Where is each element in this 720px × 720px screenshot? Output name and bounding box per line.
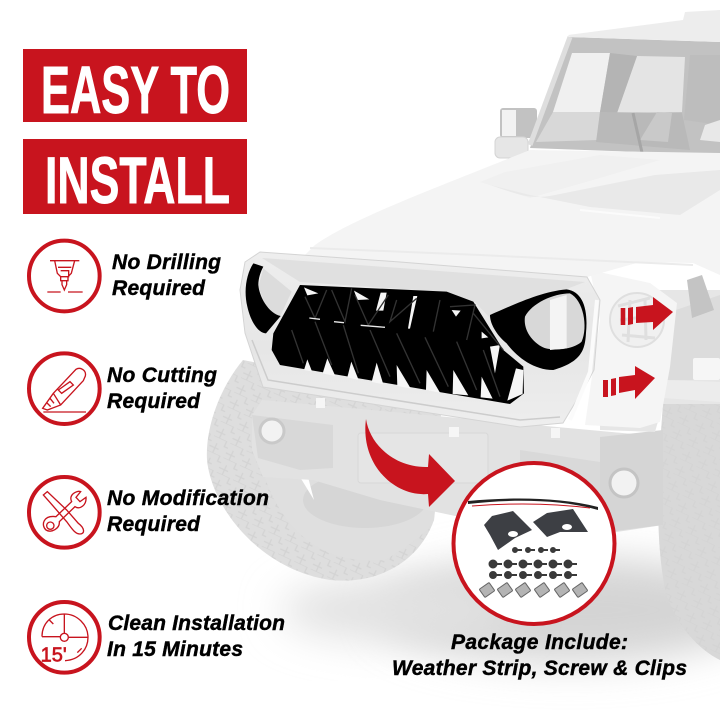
red arrow to headlight: bar 2 — [628, 307, 633, 325]
left eye black — [246, 263, 281, 333]
icon: wrench and screwdriver — [29, 477, 100, 548]
icon: drill — [29, 241, 100, 311]
right tyre — [658, 400, 720, 660]
clips — [479, 582, 588, 598]
curved red arrow — [365, 419, 455, 507]
grille right highlight — [570, 300, 597, 420]
text: Required — [107, 390, 201, 413]
title: install: INSTALL — [45, 143, 230, 217]
left tyre — [207, 360, 442, 581]
lower body right — [600, 290, 720, 432]
right eye black — [490, 289, 587, 370]
white teeth — [304, 287, 523, 401]
front fender — [585, 270, 677, 428]
feature: no cutting — [29, 353, 217, 424]
title: easy to: EASY TO — [41, 53, 230, 128]
grille lower edge — [252, 340, 560, 420]
package circle — [454, 463, 614, 624]
hood latch — [687, 275, 714, 318]
package caption: Package Include: — [451, 631, 628, 654]
red arrow lower — [603, 366, 655, 399]
red arrow to headlight: bar 1 — [621, 308, 625, 325]
feature: clean installation — [29, 602, 285, 673]
jeep vehicle (faded) — [207, 10, 720, 660]
headlight — [610, 293, 664, 347]
text: No Modification — [107, 487, 269, 510]
hood — [305, 150, 720, 277]
grille — [240, 252, 600, 427]
icon: 15 minute clock: 15' — [41, 644, 67, 666]
weather strip — [468, 499, 598, 510]
right eye mesh — [525, 293, 585, 350]
red arrow to headlight: head — [636, 297, 673, 330]
brackets — [484, 509, 588, 550]
text: In 15 Minutes — [107, 638, 243, 661]
text: Clean Installation — [108, 612, 285, 635]
feature: no drilling — [29, 241, 221, 311]
left eye light — [258, 268, 292, 317]
text: Required — [107, 513, 201, 536]
package caption: Weather Strip, Screw & Clips — [392, 657, 687, 680]
right tyre tread — [658, 404, 720, 660]
roof — [568, 10, 720, 42]
grille frame — [240, 252, 600, 427]
wiper — [633, 113, 657, 170]
front bumper — [252, 398, 663, 533]
title: easy to — [23, 49, 247, 128]
text: No Drilling — [112, 251, 221, 274]
title: install — [23, 139, 247, 217]
feature: no modification — [29, 477, 269, 548]
grille brow shade — [262, 258, 585, 318]
icon: 15 minute clock — [29, 602, 100, 673]
icon: utility knife — [29, 353, 100, 424]
text: Required — [112, 277, 206, 300]
windshield frame — [530, 37, 720, 155]
ground shadow — [280, 558, 720, 662]
grille opening — [272, 285, 524, 404]
tooth highlights — [292, 288, 503, 397]
side mirror — [495, 37, 570, 158]
glass panels — [536, 53, 720, 150]
screws — [489, 548, 577, 578]
text: No Cutting — [107, 364, 217, 387]
